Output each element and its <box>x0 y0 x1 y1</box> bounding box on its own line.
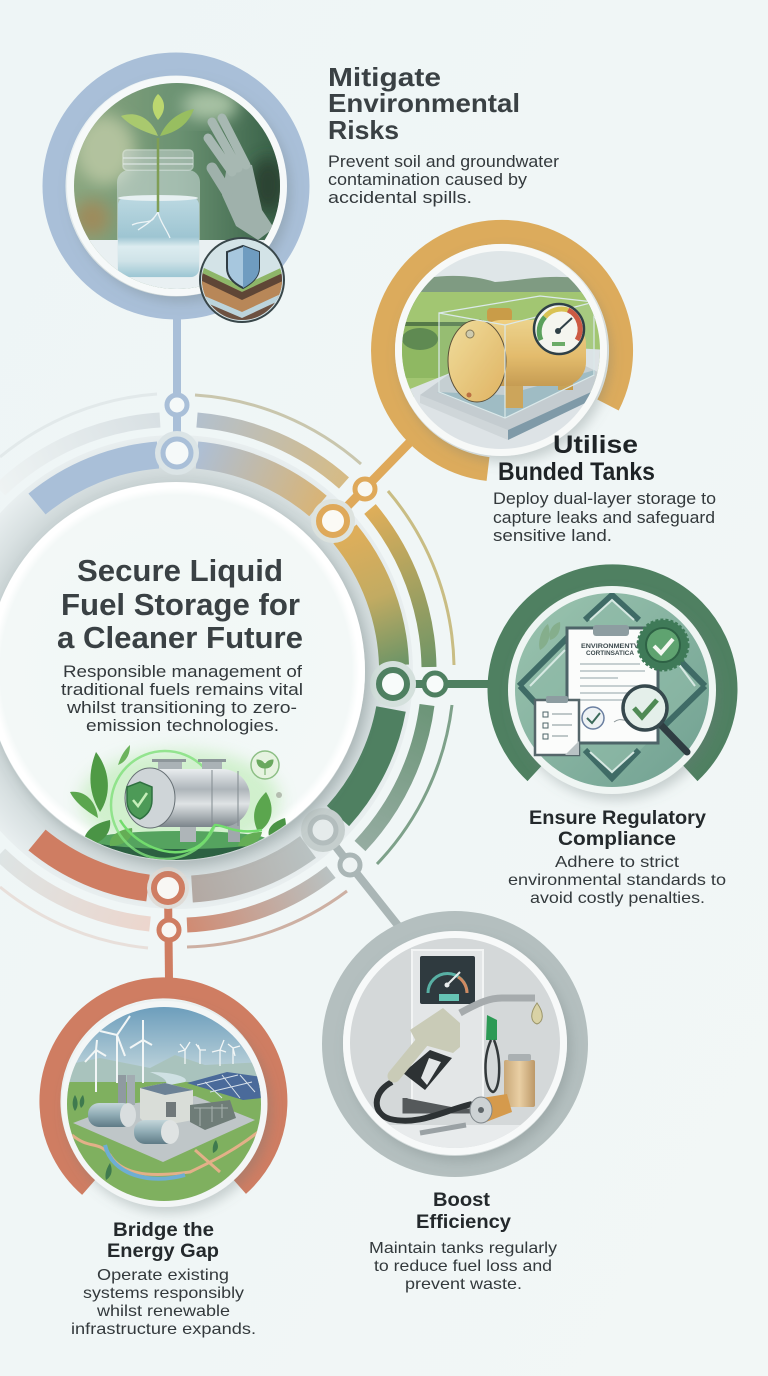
nozzle spout and drip <box>460 998 542 1024</box>
description <box>71 1267 256 1338</box>
central title: Fuel Storage for <box>61 587 300 622</box>
panel: Bridge the Energy Gap <box>50 988 277 1338</box>
heading <box>328 62 520 145</box>
description: Prevent soil and groundwater <box>328 153 560 171</box>
description <box>493 490 716 545</box>
central description <box>61 662 303 735</box>
description: capture leaks and safeguard <box>493 509 715 527</box>
connector nodes <box>147 395 446 940</box>
heading <box>416 1190 511 1233</box>
description <box>328 153 560 207</box>
icon: approval seal <box>638 620 688 670</box>
heading <box>498 431 655 486</box>
panel: Ensure Regulatory Compliance <box>499 575 727 907</box>
green ring with image <box>499 575 727 795</box>
central description: whilst transitioning to zero- <box>66 698 297 717</box>
central title <box>57 553 303 655</box>
central title: Secure Liquid <box>77 553 283 588</box>
panel: central hub <box>0 482 365 874</box>
icon: soil shield badge <box>200 238 285 322</box>
central disc <box>0 482 365 860</box>
central ring system <box>0 394 454 948</box>
description: contamination caused by <box>328 171 528 189</box>
heading: Bridge the <box>113 1220 214 1241</box>
jar <box>117 150 200 278</box>
hose <box>377 1082 472 1121</box>
central description: emission technologies. <box>86 716 279 735</box>
description: environmental standards to <box>508 872 726 889</box>
description <box>369 1240 557 1293</box>
heading: Boost <box>433 1190 491 1211</box>
heading: Bunded Tanks <box>498 458 655 486</box>
central description: Responsible management of <box>63 662 302 681</box>
icon: gauge <box>534 304 584 354</box>
heading <box>107 1220 219 1262</box>
terracotta ring with image <box>50 988 277 1207</box>
icon: compliance document <box>567 625 658 743</box>
icon: compliance document: ENVIRONMENTVL <box>581 643 643 650</box>
description: whilst renewable <box>96 1303 230 1320</box>
description <box>508 854 726 907</box>
description: Adhere to strict <box>555 854 680 871</box>
grey ring with image <box>332 922 578 1166</box>
icon: compliance document: CORTINSATICA <box>586 650 634 657</box>
heading: Compliance <box>558 829 676 850</box>
connector lines <box>168 318 490 980</box>
description: prevent waste. <box>405 1276 522 1293</box>
blue ring with image <box>54 64 298 322</box>
heading: Environmental <box>328 88 520 118</box>
heading: Mitigate <box>328 62 441 92</box>
nozzle handle <box>394 1008 460 1090</box>
icon: checklist <box>535 696 579 755</box>
heading: Risks <box>328 115 399 145</box>
amber ring with image <box>383 232 621 469</box>
description: avoid costly penalties. <box>530 890 705 907</box>
solar array <box>187 1072 262 1100</box>
description: Deploy dual-layer storage to <box>493 490 716 508</box>
central description: traditional fuels remains vital <box>61 680 303 699</box>
description: Maintain tanks regularly <box>369 1240 557 1257</box>
description: systems responsibly <box>83 1285 244 1302</box>
icon: magnifier <box>623 686 687 752</box>
heading: Ensure Regulatory <box>529 808 706 829</box>
heading: Energy Gap <box>107 1241 219 1262</box>
plant building <box>140 1083 193 1123</box>
central image: protected storage tank <box>70 745 286 874</box>
panel: Utilise Bunded Tanks <box>383 232 716 545</box>
heading: Efficiency <box>416 1212 511 1233</box>
description: accidental spills. <box>328 189 472 207</box>
seedling <box>121 94 194 212</box>
hand <box>208 118 274 240</box>
panel: Mitigate Environmental Risks <box>54 62 560 322</box>
central title: a Cleaner Future <box>57 620 303 655</box>
description: Operate existing <box>97 1267 229 1284</box>
heading: Utilise <box>553 431 638 459</box>
panel: Boost Efficiency <box>332 922 578 1293</box>
heading <box>529 808 706 850</box>
description: sensitive land. <box>493 527 612 545</box>
description: to reduce fuel loss and <box>374 1258 552 1275</box>
storage tanks <box>88 1103 179 1144</box>
description: infrastructure expands. <box>71 1321 256 1338</box>
